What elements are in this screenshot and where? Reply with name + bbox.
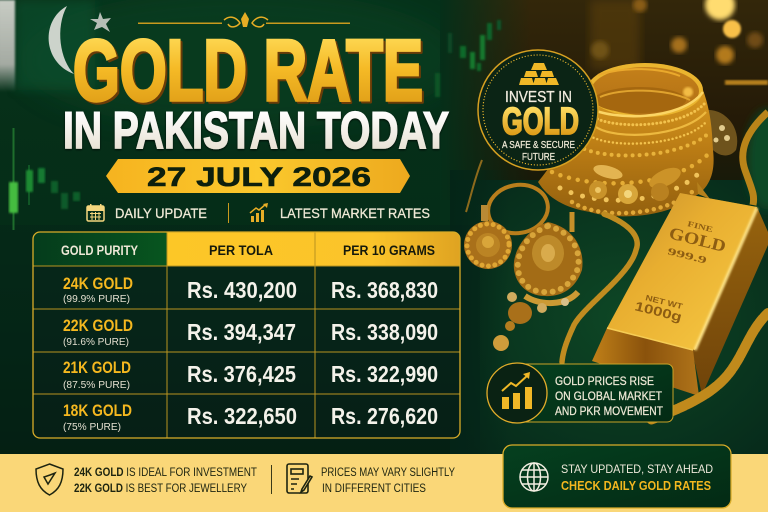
title: gold rate bbox=[73, 23, 425, 121]
prices note: IN DIFFERENT CITIES bbox=[322, 483, 426, 495]
row: 21k bbox=[63, 358, 438, 391]
jewellery: gold bar: NET WT bbox=[645, 293, 684, 311]
candlestick chart right bbox=[435, 20, 501, 97]
jewellery: gold bar bbox=[592, 193, 768, 396]
title: in pakistan today: IN PAKISTAN TODAY bbox=[63, 102, 449, 160]
panel: stay updated bbox=[503, 445, 731, 508]
date ribbon bbox=[106, 159, 410, 193]
row: 24k: (99.9% PURE) bbox=[63, 294, 130, 305]
badge: invest in gold bbox=[478, 50, 598, 170]
row: 21k: (87.5% PURE) bbox=[63, 380, 130, 391]
prices note bbox=[321, 467, 455, 495]
row: 18k: Rs. 322,650 bbox=[187, 403, 297, 429]
badge: invest in gold: GOLD bbox=[502, 101, 579, 143]
candlestick chart left bbox=[9, 128, 80, 230]
latest market rates: LATEST MARKET RATES bbox=[280, 205, 430, 221]
jewellery: chain top right bbox=[743, 112, 768, 205]
prices note: PRICES MAY VARY SLIGHTLY bbox=[321, 467, 455, 479]
row: 24k bbox=[63, 274, 438, 305]
row: 21k: 21K GOLD bbox=[63, 358, 131, 377]
jewellery: gold bar: 999.9 bbox=[666, 246, 708, 267]
row: 22k: (91.6% PURE) bbox=[63, 337, 129, 348]
row: 18k bbox=[63, 401, 438, 433]
row: 18k: Rs. 276,620 bbox=[331, 403, 438, 429]
investment note: 22K GOLD IS BEST FOR JEWELLERY bbox=[74, 483, 247, 495]
icon: gold bars bbox=[519, 63, 559, 85]
title: gold rate: GOLD RATE bbox=[73, 23, 423, 119]
price table bbox=[33, 232, 460, 438]
row: 21k: Rs. 322,990 bbox=[331, 361, 438, 387]
row: 24k: Rs. 430,200 bbox=[187, 277, 297, 303]
callout: gold prices rise: ON GLOBAL MARKET bbox=[555, 389, 663, 403]
row: 22k bbox=[63, 316, 438, 348]
jewellery: gold bar: FINE bbox=[687, 219, 714, 234]
row: 18k: (75% PURE) bbox=[63, 422, 121, 433]
callout: gold prices rise: GOLD PRICES RISE bbox=[555, 374, 654, 388]
title: gold rate: GOLD RATE bbox=[75, 25, 425, 121]
investment note bbox=[74, 467, 257, 495]
jewellery: thin chain left bbox=[466, 160, 482, 212]
bottom band bbox=[0, 454, 768, 512]
badge: invest in gold: FUTURE bbox=[522, 152, 555, 163]
table header: GOLD PURITY bbox=[61, 243, 138, 258]
jewellery: ring bbox=[484, 180, 552, 238]
row: 22k: 22K GOLD bbox=[63, 316, 133, 335]
badge: invest in gold: A SAFE & SECURE bbox=[502, 140, 575, 151]
panel: stay updated: CHECK DAILY GOLD RATES bbox=[561, 479, 711, 493]
daily update bbox=[87, 204, 207, 221]
icon: shield bbox=[36, 464, 63, 495]
panel: stay updated: STAY UPDATED, STAY AHEAD bbox=[561, 462, 713, 476]
callout: gold prices rise bbox=[487, 363, 673, 423]
icon: rising chart bbox=[250, 203, 268, 222]
investment note: 24K GOLD IS IDEAL FOR INVESTMENT bbox=[74, 467, 257, 479]
icon: globe bbox=[520, 463, 548, 491]
badge: invest in gold: INVEST IN bbox=[505, 89, 572, 106]
icon: calendar bbox=[87, 204, 104, 221]
table header: PER TOLA bbox=[209, 243, 273, 258]
jewellery: earrings bbox=[464, 205, 583, 351]
row: 18k: 18K GOLD bbox=[63, 401, 132, 420]
row: 22k: Rs. 394,347 bbox=[187, 319, 296, 345]
latest market rates bbox=[228, 203, 430, 223]
pakistan flag bbox=[0, 0, 111, 92]
daily update: DAILY UPDATE bbox=[115, 205, 207, 221]
date ribbon: 27 JULY 2026 bbox=[147, 162, 371, 192]
table header: PER 10 GRAMS bbox=[343, 243, 435, 258]
jewellery: gold bar: 1000g bbox=[633, 298, 684, 325]
jewellery: chain bottom right bbox=[650, 313, 768, 420]
bokeh lights bbox=[590, 0, 768, 85]
jewellery: stacked bangles bbox=[538, 63, 737, 216]
icon: document with pen bbox=[287, 464, 312, 493]
row: 24k: Rs. 368,830 bbox=[331, 277, 438, 303]
jewellery: chain across velvet bbox=[562, 214, 637, 362]
jewellery: gold bar: GOLD bbox=[667, 223, 728, 256]
row: 22k: Rs. 338,090 bbox=[331, 319, 438, 345]
row: 21k: Rs. 376,425 bbox=[187, 361, 296, 387]
table header bbox=[33, 232, 460, 266]
ornament and title rule bbox=[138, 12, 350, 27]
icon: rising bars bbox=[502, 372, 532, 409]
callout: gold prices rise: AND PKR MOVEMENT bbox=[555, 404, 664, 418]
row: 24k: 24K GOLD bbox=[63, 274, 133, 293]
